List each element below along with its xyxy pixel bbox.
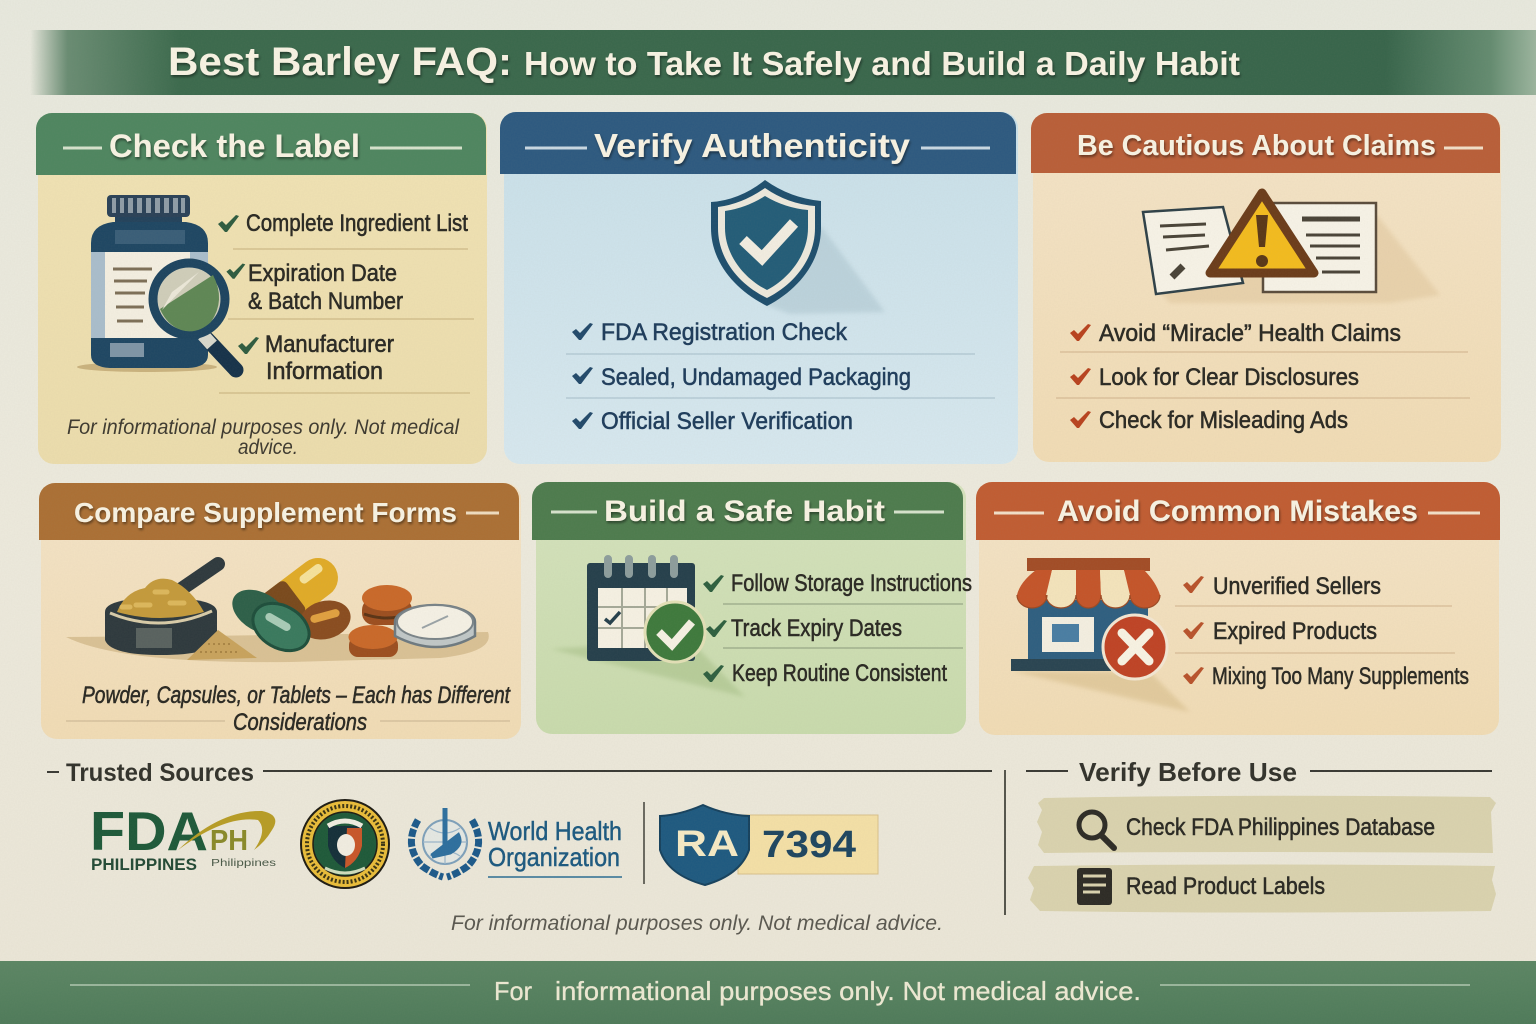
badge: RA 7394: RA [675, 823, 739, 864]
logo: WHO [411, 808, 622, 877]
title banner: Best Barley FAQ: [168, 40, 512, 84]
logo: FDA Philippines: PH [210, 825, 248, 857]
caption: Powder, Capsules, or Tablets – Each has Different [82, 682, 511, 709]
disclaimer: For informational purposes only. Not medical advice. [451, 912, 943, 935]
icon: calendar with check [551, 559, 745, 697]
panel: verify authenticity [500, 112, 1018, 464]
checklist [1175, 573, 1469, 690]
icon: powder capsules tablets [66, 550, 489, 662]
heading: verify authenticity [500, 112, 1016, 174]
checklist: Look for Clear Disclosures [1099, 364, 1359, 391]
checklist [566, 319, 995, 435]
icon: shield [711, 180, 885, 314]
checklist: Unverified Sellers [1213, 573, 1381, 600]
checklist [703, 570, 972, 687]
disclaimer [67, 416, 460, 459]
caption [66, 682, 511, 736]
icon: warning and documents [1143, 193, 1440, 303]
badge: RA 7394: 7394 [762, 824, 856, 866]
checklist: Track Expiry Dates [731, 615, 902, 642]
checklist: Official Seller Verification [601, 408, 853, 435]
checklist: & Batch Number [248, 288, 403, 315]
badge: RA 7394 [660, 805, 878, 885]
item: check FDA database: Check FDA Philippines Database [1126, 814, 1435, 841]
heading: check the label [36, 113, 486, 175]
logo: seal [301, 800, 389, 888]
icon: shop with x [1011, 558, 1190, 712]
heading: build a safe habit [532, 482, 963, 540]
item: check FDA database [1037, 796, 1496, 853]
heading: be cautious: Be Cautious About Claims [1077, 130, 1436, 162]
panel: check the label [36, 113, 487, 464]
icon: supplement bottle with magnifier [77, 195, 236, 372]
heading: compare forms: Compare Supplement Forms [74, 497, 457, 528]
heading: check the label: Check the Label [109, 128, 360, 164]
logo: FDA Philippines [90, 800, 276, 874]
logo: WHO: Organization [488, 842, 620, 872]
item: read product labels: Read Product Labels [1126, 873, 1325, 900]
panel: build a safe habit [532, 482, 972, 734]
heading: avoid mistakes [976, 482, 1500, 540]
checklist: Follow Storage Instructions [731, 570, 972, 597]
checklist [1056, 320, 1470, 434]
checklist: Information [266, 358, 383, 385]
panel: compare supplement forms [39, 483, 521, 739]
title banner: How to Take It Safely and Build a Daily Habit [524, 45, 1240, 82]
caption: Considerations [233, 709, 367, 736]
heading: build a safe habit: Build a Safe Habit [604, 495, 885, 528]
section: verify before use [1026, 757, 1496, 912]
checklist: Sealed, Undamaged Packaging [601, 364, 911, 391]
title banner [30, 30, 1536, 95]
checklist [218, 210, 474, 393]
item: read product labels [1028, 864, 1496, 912]
checklist: Manufacturer [265, 331, 394, 358]
heading: trusted sources: Trusted Sources [66, 759, 254, 787]
footer band [0, 961, 1536, 1024]
checklist: Mixing Too Many Supplements [1212, 663, 1469, 690]
panel: avoid common mistakes [976, 482, 1500, 735]
logo: FDA Philippines: PHILIPPINES [91, 855, 197, 874]
disclaimer: For informational purposes only. Not medical [67, 416, 460, 439]
heading: avoid mistakes: Avoid Common Mistakes [1057, 495, 1418, 528]
heading: verify authenticity: Verify Authenticity [594, 127, 911, 164]
logo: FDA Philippines: FDA [90, 800, 208, 862]
checklist: Avoid “Miracle” Health Claims [1099, 320, 1401, 347]
logo: FDA Philippines: Philippines [211, 858, 276, 869]
checklist: Expired Products [1213, 618, 1377, 645]
checklist: Complete Ingredient List [246, 210, 468, 237]
panel: be cautious about claims [1031, 113, 1501, 462]
logo: WHO: World Health [488, 816, 622, 846]
heading: verify before use: Verify Before Use [1079, 757, 1297, 787]
heading: compare forms [39, 483, 519, 540]
footer band: informational purposes only. Not medical advice. [555, 976, 1141, 1006]
checklist: Expiration Date [248, 260, 397, 287]
checklist: FDA Registration Check [601, 319, 848, 346]
disclaimer: advice. [238, 436, 298, 459]
checklist: Keep Routine Consistent [732, 660, 947, 687]
section: trusted sources [47, 759, 992, 935]
heading: be cautious [1031, 113, 1500, 173]
checklist: Check for Misleading Ads [1099, 407, 1348, 434]
footer band: For [494, 976, 532, 1006]
